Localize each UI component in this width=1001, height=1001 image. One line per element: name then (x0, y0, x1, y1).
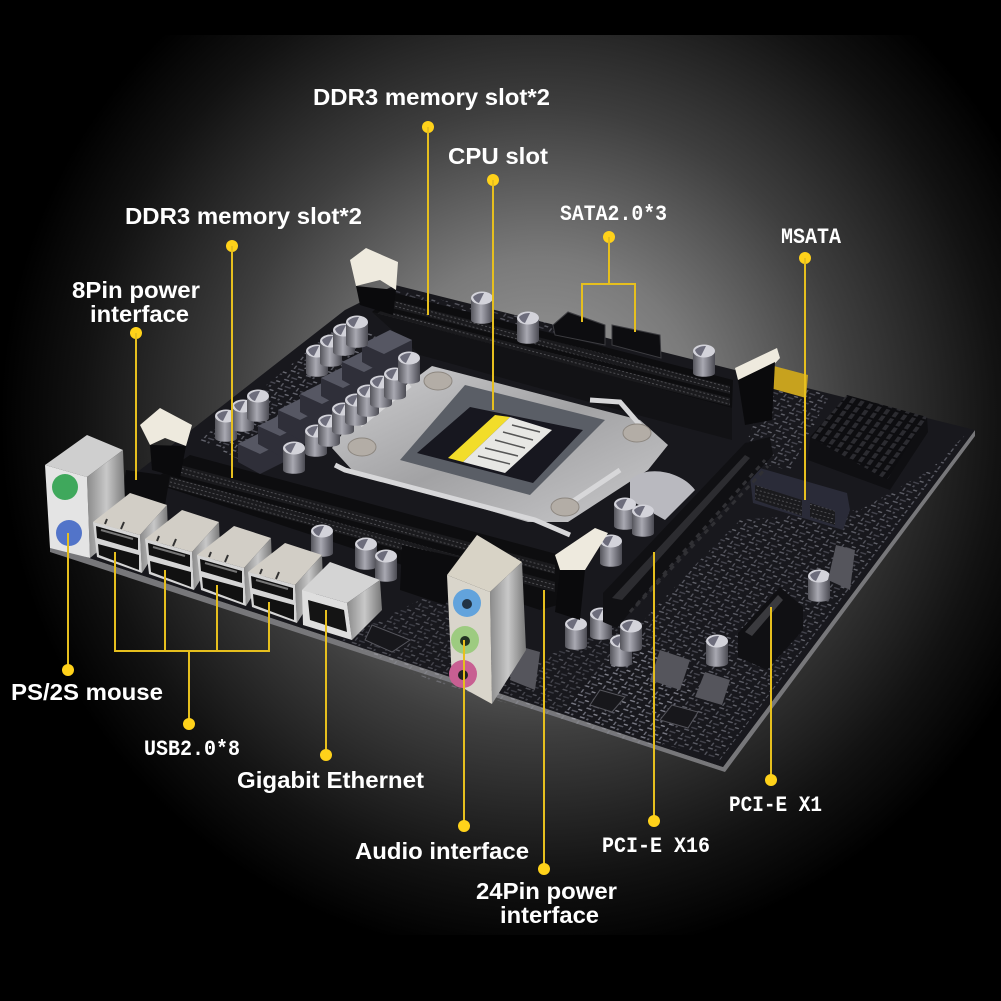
PS/2 blue port (56, 520, 82, 546)
callout: 8Pin power interface: interface (90, 301, 189, 327)
audio blue jack (453, 589, 481, 617)
Ethernet port (302, 562, 382, 640)
callout: MSATA: MSATA (781, 225, 842, 250)
warning label (448, 415, 510, 462)
silkscreen: top strip (380, 290, 560, 345)
motherboard (45, 248, 975, 772)
memory clips (140, 248, 780, 570)
callout: Gigabit Ethernet (237, 610, 424, 793)
callout: DDR3 memory slot back: DDR3 memory slot*2 (313, 84, 550, 110)
callout: Audio interface: Audio interface (355, 838, 529, 864)
8-pin connector (122, 470, 170, 505)
callout: USB: USB2.0*8 (144, 737, 240, 762)
silkscreen: left of VRM (200, 320, 385, 460)
silkscreen: right strip (740, 380, 830, 470)
retention levers (335, 385, 640, 535)
callout: Gigabit Ethernet: Gigabit Ethernet (237, 767, 424, 793)
callout: 8Pin power interface (72, 277, 200, 480)
GPIO header (770, 365, 808, 398)
board surface (50, 285, 975, 767)
board edge (50, 430, 975, 772)
callout: 24Pin power interface: interface (500, 902, 599, 928)
callout: SATA: SATA2.0*3 (560, 202, 667, 227)
mSATA slot (750, 468, 850, 530)
callout: DDR3 memory slot front (125, 203, 362, 478)
scattered capacitors (311, 292, 830, 667)
audio port bracket (447, 535, 526, 704)
callout: 24Pin power interface (476, 590, 617, 928)
callout: PCI-E X16 (602, 552, 710, 859)
callout: 24Pin power interface: 24Pin power (476, 878, 617, 904)
silkscreen: audio area (340, 590, 690, 750)
callout: USB (115, 552, 269, 762)
callout: DDR3 memory slot back (313, 84, 550, 315)
callout: CPU slot (448, 143, 548, 410)
VRM capacitors and chokes (215, 316, 420, 474)
memory clip bases (150, 286, 775, 620)
audio green jack (451, 626, 479, 654)
screws (348, 372, 651, 516)
socket cover (417, 407, 583, 483)
PCI-E X1 slot (738, 587, 803, 670)
audio pink jack (449, 660, 477, 688)
callout: PCI-E X1: PCI-E X1 (729, 793, 822, 818)
chips (365, 625, 698, 728)
PCI-E X16 slot (603, 437, 773, 628)
callout: PCI-E X16: PCI-E X16 (602, 834, 710, 859)
callout: PCI-E X1 (729, 607, 822, 818)
warning text (463, 417, 552, 473)
callout: DDR3 memory slot front: DDR3 memory slot*2 (125, 203, 362, 229)
CPU socket (332, 366, 668, 535)
socket opening (400, 385, 605, 495)
socket frame (332, 366, 668, 522)
pin headers (510, 545, 855, 705)
battery (630, 471, 695, 520)
callout: 8Pin power interface: 8Pin power (72, 277, 200, 303)
PS/2 green port (52, 474, 78, 500)
PS/2 port bracket (45, 435, 126, 558)
callout: CPU slot: CPU slot (448, 143, 548, 169)
callout: MSATA (781, 225, 842, 500)
back memory slots (372, 293, 733, 440)
24-pin connector (400, 545, 470, 605)
SATA ports (553, 312, 661, 358)
heat sink (808, 395, 928, 490)
callout: PS/2S mouse (11, 533, 163, 705)
callout: Audio interface (355, 640, 529, 864)
callout: SATA (560, 202, 667, 332)
front memory slots (150, 455, 575, 610)
callout: PS/2S mouse: PS/2S mouse (11, 679, 163, 705)
USB ports (93, 493, 323, 623)
silkscreen: lower-right (560, 435, 965, 760)
